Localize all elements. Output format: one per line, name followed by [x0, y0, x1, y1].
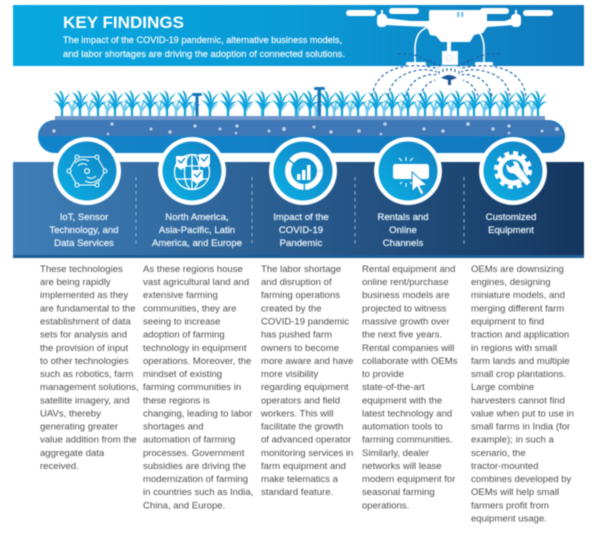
text block: owners to become	[261, 343, 339, 354]
label	[49, 212, 119, 249]
label: America, and Europe	[152, 238, 242, 249]
text block: OEMs will help small	[471, 487, 559, 498]
text block: OEMs are downsizing	[471, 264, 564, 275]
text block	[471, 264, 574, 524]
text block: combines developed by	[471, 474, 572, 485]
text block: collaborate with OEMs	[362, 356, 458, 367]
text block: farming communities in	[143, 382, 241, 393]
text block: miniature models, and	[471, 290, 565, 301]
text block: operators and field	[261, 395, 340, 406]
text block: tractor-mounted	[471, 461, 538, 472]
text block: communities, they are	[143, 304, 236, 314]
text block: example); in such a	[471, 435, 554, 446]
text block: COVID-19 pandemic	[261, 316, 349, 328]
text block: are fundamental to the	[40, 304, 136, 314]
subtitle: The impact of the COVID-19 pandemic, alternative business models,	[63, 35, 342, 46]
label: North America,	[165, 212, 229, 223]
text block: value addition from the	[40, 435, 137, 446]
band	[13, 162, 584, 258]
text block: farmers profit from	[471, 500, 549, 511]
text block: in regions with small	[471, 343, 557, 354]
text block: operations.	[362, 500, 409, 511]
text block: subsidies are driving the	[143, 461, 246, 472]
text block: aggregate data	[40, 448, 105, 459]
label: Rentals and	[377, 212, 429, 223]
text block: the provision of input	[40, 343, 128, 354]
icon: IoT sensor	[53, 137, 121, 205]
text block: monitoring services in	[261, 448, 353, 459]
text block: equipment with the	[362, 395, 442, 406]
panel: customized	[471, 137, 574, 524]
text block: generating greater	[40, 422, 119, 433]
icon: gear and wrench	[479, 137, 547, 205]
text block: modern equipment for	[362, 474, 456, 485]
icon: click button	[374, 137, 442, 205]
text block: UAVs, thereby	[40, 408, 101, 420]
text block: The labor shortage	[261, 264, 341, 275]
text block: sets for analysis and	[40, 330, 127, 341]
text block: workers. This will	[260, 408, 334, 420]
text block: regarding equipment	[261, 382, 349, 393]
label: Online	[389, 225, 417, 236]
text block: operations. Moreover, the	[143, 356, 251, 367]
panel: IoT	[40, 137, 139, 472]
text block	[260, 264, 353, 498]
text block: farm lands and multiple	[471, 356, 570, 367]
text block: seeing to increase	[143, 316, 220, 328]
label	[152, 212, 242, 249]
text block: in countries such as India,	[143, 487, 253, 498]
crop row	[53, 90, 547, 117]
text block: traction and application	[471, 330, 569, 341]
text block: facilitate the growth	[261, 422, 343, 433]
text block: more aware and have	[261, 356, 353, 367]
text block: vast agricultural land and	[143, 277, 249, 288]
label	[273, 212, 329, 249]
text block: extensive farming	[143, 290, 218, 301]
label: COVID-19	[279, 225, 323, 236]
text block: has pushed farm	[261, 330, 332, 341]
text block: these regions is	[143, 395, 210, 406]
text block: satellite imagery, and	[40, 395, 130, 406]
text block: technology in equipment	[143, 343, 247, 354]
subtitle: and labor shortages are driving the adoption of connected solutions.	[63, 49, 345, 60]
text block: online rent/purchase	[362, 277, 449, 288]
subtitle	[63, 35, 345, 60]
text block: created by the	[261, 304, 322, 314]
text block: Rental equipment and	[362, 264, 455, 275]
text block: scenario, the	[471, 448, 526, 459]
icon: globe with checks	[158, 137, 226, 205]
label: Equipment	[488, 225, 534, 236]
label	[377, 212, 429, 249]
text block: of advanced operator	[261, 435, 352, 446]
text block: Rental companies will	[362, 343, 454, 354]
icon: donut chart	[269, 137, 337, 205]
text block: farm equipment and	[261, 461, 346, 472]
panel: regions	[143, 137, 253, 511]
text block: merging different farm	[471, 304, 564, 314]
label: Customized	[486, 212, 536, 223]
text block: massive growth over	[362, 316, 450, 328]
text block: equipment usage.	[471, 514, 547, 524]
label: Asia-Pacific, Latin	[159, 225, 235, 236]
text block: harvesters cannot find	[471, 395, 565, 406]
text block: adoption of farming	[143, 330, 225, 341]
text block: standard feature.	[261, 487, 333, 498]
text block: to provide	[362, 369, 404, 380]
panel: COVID	[260, 137, 353, 498]
text block: shortages and	[143, 422, 204, 433]
text block	[143, 264, 253, 511]
icon: drone	[346, 8, 553, 66]
text block: establishment of data	[40, 316, 131, 328]
text block	[40, 264, 139, 472]
text block: changing, leading to labor	[143, 408, 253, 420]
soil bar	[38, 116, 565, 153]
text block: make telematics a	[261, 474, 339, 485]
text block: equipment to find	[471, 316, 544, 328]
text block: such as robotics, farm	[40, 369, 133, 380]
text block: more visibility	[261, 369, 319, 380]
text block: latest technology and	[362, 408, 452, 420]
label: Data Services	[54, 238, 114, 249]
text block: Similarly, dealer	[362, 448, 430, 459]
text block: and disruption of	[261, 277, 332, 288]
text block: mindset of existing	[143, 369, 222, 380]
text block: processes. Government	[143, 448, 245, 459]
text block: small farms in India (for	[471, 422, 571, 433]
header banner	[13, 5, 584, 66]
label: Technology, and	[49, 225, 119, 236]
text block: business models are	[362, 290, 450, 301]
text block: Large combine	[471, 382, 534, 393]
label: Pandemic	[280, 238, 323, 249]
icon: sprinkler	[441, 75, 457, 85]
label: Impact of the	[273, 212, 329, 223]
text block: farming operations	[261, 290, 340, 301]
text block: seasonal farming	[362, 487, 435, 498]
text block: implemented as they	[40, 290, 128, 301]
text block: automation tools to	[362, 422, 443, 433]
text block: are being rapidly	[40, 277, 111, 288]
spray arcs	[372, 54, 526, 96]
text block: the next five years.	[362, 330, 442, 341]
text block: networks will lease	[362, 461, 442, 472]
text block: small crop plantations.	[471, 369, 566, 380]
label: IoT, Sensor	[60, 212, 109, 223]
text block: China, and Europe.	[143, 500, 225, 511]
text block: value when put to use in	[471, 408, 574, 420]
text block: projected to witness	[362, 304, 447, 314]
panel: rentals	[362, 137, 458, 511]
text block: These technologies	[40, 264, 123, 275]
icon: soil sensor stakes	[192, 87, 325, 117]
text block: management solutions,	[40, 382, 139, 393]
title: KEY FINDINGS	[63, 14, 184, 32]
text block: modernization of farming	[143, 474, 248, 485]
text block	[362, 264, 458, 511]
label: Channels	[383, 238, 423, 249]
text block: As these regions house	[143, 264, 243, 275]
text block: automation of farming	[143, 435, 235, 446]
text block: to other technologies	[40, 356, 129, 367]
text block: farming communities.	[362, 435, 453, 446]
label	[486, 212, 536, 236]
text block: engines, designing	[471, 277, 551, 288]
text block: received.	[40, 461, 79, 472]
text block: state-of-the-art	[362, 382, 425, 393]
